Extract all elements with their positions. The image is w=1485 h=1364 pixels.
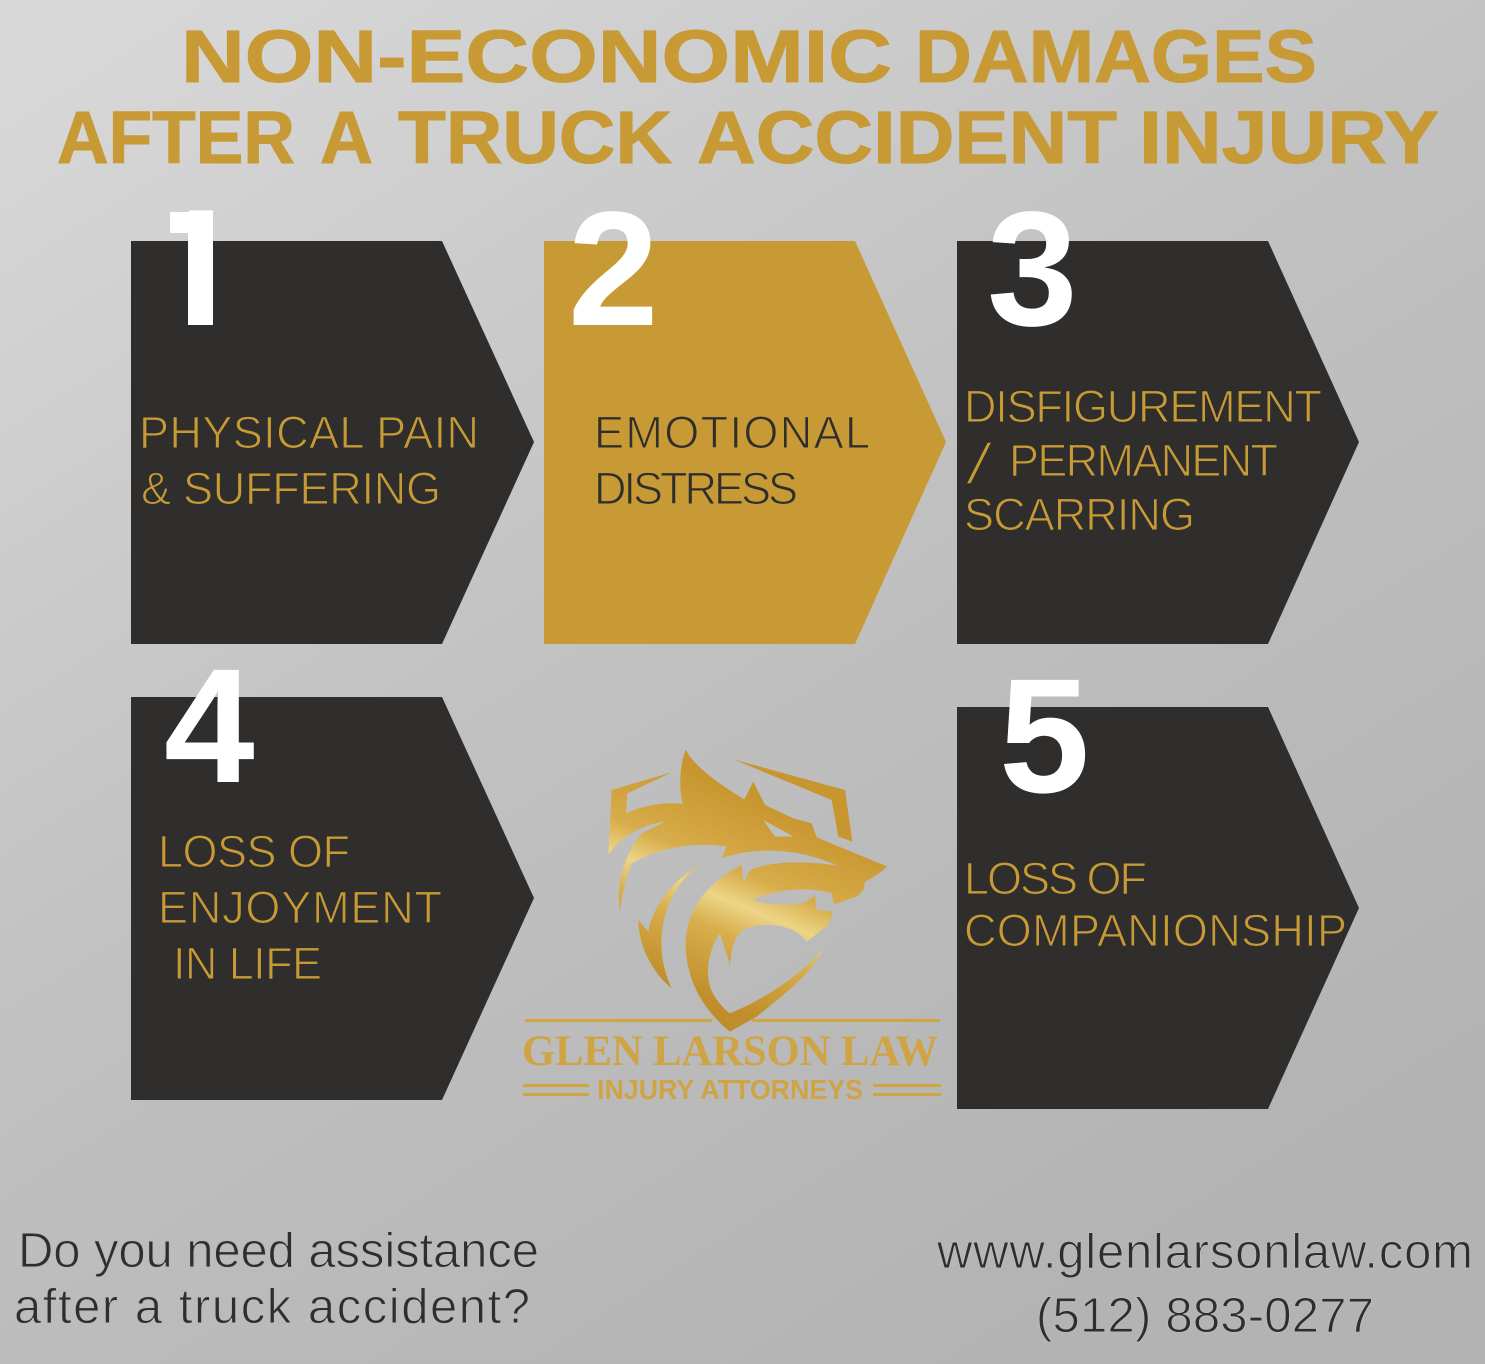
label: physical pain and suffering: & SUFFERING bbox=[141, 463, 441, 514]
label: loss of enjoyment in life: ENJOYMENT bbox=[158, 882, 442, 933]
label: loss of enjoyment in life: LOSS OF bbox=[158, 826, 350, 877]
panel: emotional distress bbox=[544, 177, 946, 644]
label: disfigurement: / bbox=[964, 432, 996, 497]
icon: wolf shield bbox=[608, 749, 887, 1032]
label: loss of companionship bbox=[964, 853, 1347, 956]
number 3: 3 bbox=[987, 177, 1078, 360]
title: ACCIDENT bbox=[697, 96, 1117, 179]
text: contact details: (512) 883-0277 bbox=[1036, 1289, 1374, 1343]
text: contact details: www.glenlarsonlaw.com bbox=[936, 1225, 1473, 1279]
text: call to action: after a truck accident? bbox=[14, 1280, 530, 1334]
title: TRUCK bbox=[398, 96, 672, 179]
title: INJURY bbox=[1139, 96, 1439, 179]
label: emotional distress: EMOTIONAL bbox=[594, 407, 870, 458]
label: physical pain and suffering bbox=[139, 407, 479, 514]
label: loss of companionship: COMPANIONSHIP bbox=[964, 905, 1347, 956]
panel: disfigurement bbox=[957, 177, 1359, 644]
number 5: 5 bbox=[999, 644, 1090, 827]
panel: loss of companionship bbox=[957, 644, 1359, 1109]
label: loss of enjoyment in life: IN LIFE bbox=[173, 938, 322, 989]
label: disfigurement: PERMANENT bbox=[1009, 435, 1278, 486]
label: physical pain and suffering: PHYSICAL PAIN bbox=[139, 407, 479, 458]
title: A bbox=[320, 96, 373, 179]
label: disfigurement: DISFIGUREMENT bbox=[964, 381, 1322, 432]
label: loss of companionship: LOSS OF bbox=[964, 853, 1147, 904]
title bbox=[57, 15, 1439, 179]
logo: Glen Larson Law bbox=[522, 749, 941, 1105]
text: contact details bbox=[936, 1225, 1473, 1343]
logo rules bbox=[523, 1019, 941, 1096]
label: loss of enjoyment in life bbox=[158, 826, 442, 989]
label: emotional distress: DISTRESS bbox=[594, 463, 798, 514]
number 1 bbox=[170, 210, 213, 325]
label: disfigurement: SCARRING bbox=[964, 489, 1195, 540]
title: DAMAGES bbox=[915, 15, 1317, 98]
label: disfigurement bbox=[964, 381, 1322, 540]
text: call to action bbox=[14, 1224, 539, 1334]
number 1: 1 bbox=[152, 177, 242, 360]
title: NON-ECONOMIC bbox=[181, 15, 892, 98]
logo wordmark: GLEN LARSON LAW bbox=[522, 1028, 938, 1075]
panel: loss of enjoyment in life bbox=[131, 634, 534, 1100]
text: call to action: Do you need assistance bbox=[18, 1224, 539, 1278]
number 2: 2 bbox=[568, 177, 659, 360]
logo tagline: INJURY ATTORNEYS bbox=[597, 1074, 863, 1105]
number 4: 4 bbox=[164, 634, 255, 817]
title: AFTER bbox=[57, 96, 295, 179]
panel: physical pain and suffering bbox=[131, 177, 534, 644]
label: emotional distress bbox=[594, 407, 870, 514]
